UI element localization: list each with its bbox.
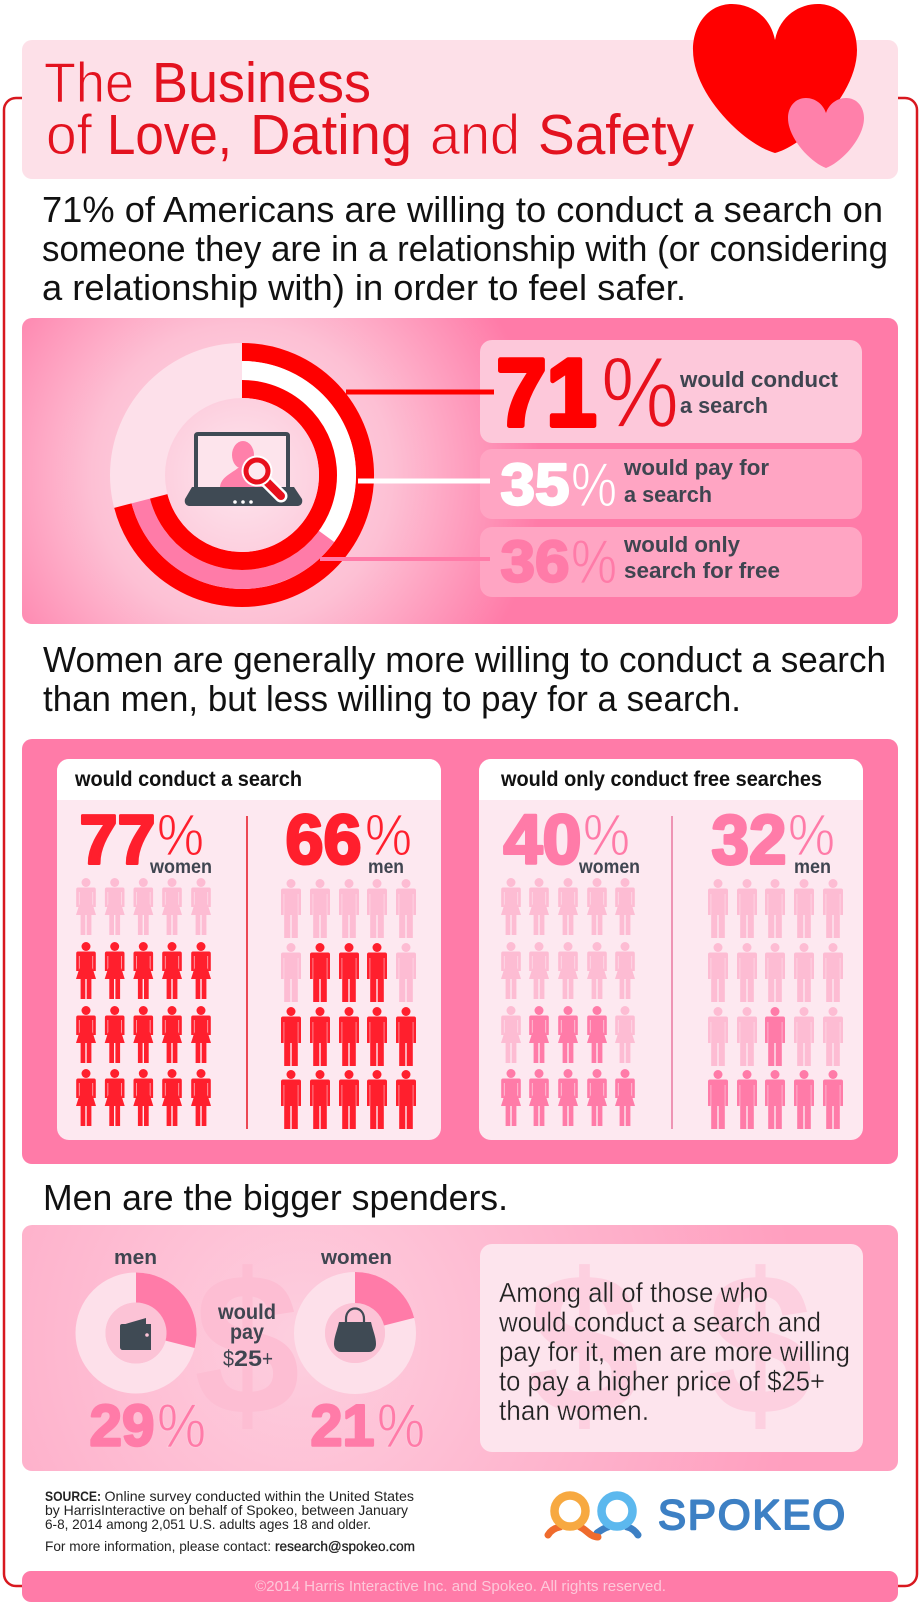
pictogram: 77 of 100 women	[76, 878, 211, 1126]
stat card: 35%	[358, 449, 862, 520]
source note: research@spokeo.com	[275, 1538, 415, 1554]
stat: 77% women: 77	[80, 800, 156, 878]
callout card: $	[707, 1231, 813, 1457]
pictogram: 32 of 100 men	[708, 879, 843, 1129]
intro text: 71% of Americans are willing to conduct a search on	[42, 189, 883, 230]
stat card: 71%: a search	[680, 393, 768, 418]
leader line: 71%	[346, 390, 490, 394]
stat: 21%: 21	[310, 1394, 374, 1458]
card: would conduct a search	[57, 759, 441, 1140]
stat card: 35%: a search	[624, 482, 712, 507]
callout text: would conduct a search and	[498, 1306, 821, 1338]
stat: 32% men: 32	[712, 800, 786, 878]
stat: 32% men: %	[788, 803, 835, 868]
heading: bigger spenders: Men are the bigger spenders.	[43, 1177, 508, 1218]
stat: 66% men	[286, 800, 412, 878]
callout text	[498, 1277, 850, 1426]
stat: 21%	[310, 1392, 425, 1461]
footer bar	[22, 1571, 898, 1602]
callout card: $	[528, 1231, 640, 1457]
callout text: Among all of those who	[499, 1277, 768, 1308]
label: would pay $25+: would	[217, 1301, 276, 1324]
panel: gender comparison	[22, 739, 898, 1164]
title panel	[22, 4, 898, 179]
footer bar: ©2014 Harris Interactive Inc. and Spokeo. All rights reserved.	[255, 1578, 666, 1595]
stat card: 36%: would only	[623, 532, 741, 557]
source note	[45, 1488, 415, 1554]
stat: 40% women: women	[578, 857, 640, 878]
source note: Online survey conducted within the United States	[104, 1488, 414, 1504]
title: The	[44, 51, 134, 115]
label: would pay $25+: $	[223, 1346, 234, 1371]
donut: women 21%	[310, 1288, 400, 1378]
card: would conduct a search: would conduct a search	[74, 768, 302, 791]
label: would pay $25+: +	[262, 1346, 273, 1371]
stat: 77% women	[80, 800, 212, 878]
stat card: 35%: 35	[500, 452, 570, 518]
stat: 66% men: men	[368, 857, 404, 878]
intro text: someone they are in a relationship with (or considering	[42, 228, 888, 269]
callout text: than women.	[499, 1395, 649, 1426]
label: women: women	[320, 1247, 392, 1269]
stat: 32% men: men	[794, 857, 831, 878]
stat card: 71%: %	[601, 337, 679, 449]
dollar sign watermark: $	[194, 1231, 300, 1457]
heading: women vs men	[43, 639, 886, 719]
title: Love,	[107, 103, 232, 167]
pictogram: 66 of 100 men	[281, 879, 416, 1129]
panel: spending	[22, 1225, 898, 1471]
intro text	[42, 189, 888, 308]
source note: 6-8, 2014 among 2,051 U.S. adults ages 18 and older.	[45, 1516, 371, 1532]
stat card: 71%: would conduct	[679, 367, 839, 392]
intro text: a relationship with) in order to feel safer.	[42, 267, 686, 308]
title: Business	[152, 51, 371, 115]
stat: 29%: 29	[90, 1394, 154, 1458]
stat card: 71%	[480, 337, 862, 449]
icon: wallet	[120, 1318, 151, 1350]
donut chart	[110, 343, 374, 607]
stat: 29%: %	[157, 1392, 206, 1461]
card: would only conduct free searches	[479, 759, 863, 1140]
logo: Spokeo: SPOKEO	[658, 1491, 845, 1538]
stat card: 71%: 71	[496, 340, 596, 446]
stat card: 35%: %	[571, 451, 617, 520]
stat card: 36%: 36	[500, 530, 570, 594]
source note: For more information, please contact:	[45, 1538, 271, 1554]
heading: women vs men: Women are generally more willing to conduct a search	[43, 639, 886, 680]
logo: Spokeo	[548, 1491, 845, 1538]
stat: 29%	[90, 1392, 206, 1461]
heading: women vs men: than men, but less willing to pay for a search.	[43, 678, 741, 719]
pictogram: 40 of 100 women	[501, 878, 635, 1126]
stat: 32% men	[712, 800, 835, 878]
stat: 66% men: 66	[286, 800, 362, 878]
stat: 77% women: %	[157, 803, 204, 868]
stat: 40% women	[504, 800, 640, 878]
label: would pay $25+: 25	[234, 1346, 262, 1371]
icon: handbag	[334, 1308, 376, 1352]
icon: hearts	[693, 4, 864, 168]
callout text: to pay a higher price of $25+	[499, 1366, 825, 1396]
stat card: 36%: %	[571, 528, 617, 597]
stat card: 36%	[320, 527, 862, 597]
stat: 40% women: %	[583, 803, 630, 868]
callout card	[480, 1231, 863, 1457]
label: would pay $25+: pay	[230, 1321, 264, 1344]
stat: 40% women: 40	[504, 800, 582, 878]
stat: 66% men: %	[365, 803, 412, 868]
stat: 77% women: women	[149, 857, 212, 878]
stat card: 36%: search for free	[624, 558, 780, 583]
title	[44, 51, 694, 167]
stat card: 35%: would pay for	[623, 455, 769, 480]
title: Dating	[250, 103, 412, 167]
card: would only conduct free searches: would only conduct free searches	[500, 768, 822, 791]
stat: 21%: %	[377, 1392, 425, 1461]
label: would pay $25+	[217, 1301, 276, 1371]
panel: willingness to search	[22, 318, 898, 624]
callout text: pay for it, men are more willing	[499, 1336, 850, 1367]
title: and	[430, 103, 520, 167]
title: of	[46, 103, 92, 167]
donut: men 29%	[90, 1288, 182, 1378]
label: men: men	[114, 1247, 157, 1269]
title: Safety	[538, 103, 694, 167]
source note: by HarrisInteractive on behalf of Spokeo, between January	[45, 1502, 408, 1518]
icon: laptop search	[185, 434, 302, 506]
source note: SOURCE:	[45, 1488, 101, 1504]
